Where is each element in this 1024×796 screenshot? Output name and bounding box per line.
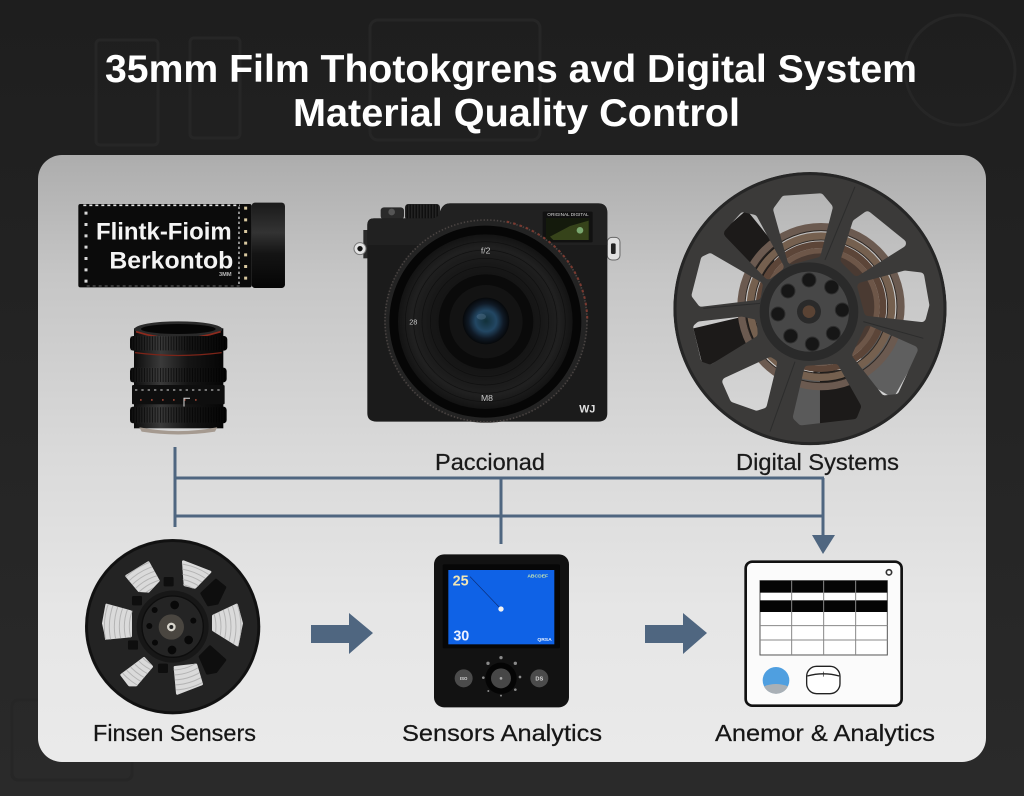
icon: small film reel xyxy=(85,539,260,714)
monitor screen xyxy=(448,570,554,645)
reel film roll xyxy=(741,227,901,387)
title: 35mm Film Thotokgrens avd Digital System xyxy=(105,48,917,91)
camera lens: M8 xyxy=(481,393,493,403)
icon: lens xyxy=(130,321,227,434)
monitor screen: 30 xyxy=(453,629,469,645)
canister label xyxy=(96,218,233,278)
camera lens: f/2 xyxy=(481,245,491,255)
title: Material Quality Control xyxy=(293,92,740,135)
label: Paccionad: Paccionad xyxy=(435,449,545,475)
monitor screen: ABCDEF xyxy=(527,574,548,580)
camera badge: WJ xyxy=(579,404,595,416)
label: Digital Systems: Digital Systems xyxy=(736,449,899,475)
icon: sensor monitor xyxy=(434,554,569,707)
label: Anemor & Analytics: Anemor & Analytics xyxy=(715,720,935,746)
small reel dark windows xyxy=(129,578,225,673)
canister label: 3MM xyxy=(219,272,232,278)
camera lens: 28 xyxy=(409,317,417,326)
camera lens xyxy=(384,219,588,423)
viewfinder xyxy=(543,212,593,242)
canister label: Berkontob xyxy=(109,247,233,274)
panel: main content xyxy=(38,155,986,762)
small reel hub xyxy=(137,591,209,663)
reel flange xyxy=(673,172,947,445)
icon: large film reel xyxy=(673,172,947,445)
connector lines xyxy=(175,447,835,554)
blue gauge circle xyxy=(763,667,789,694)
monitor controls xyxy=(455,656,548,697)
canister label: Flintk-Fioim xyxy=(96,218,232,245)
arrow 1 xyxy=(311,613,373,654)
panel: data table card xyxy=(746,562,902,706)
title xyxy=(105,48,917,135)
monitor controls: DS xyxy=(535,676,543,682)
data table xyxy=(760,581,887,655)
camera dials xyxy=(381,204,440,220)
reel hub xyxy=(760,262,858,361)
icon: camera xyxy=(354,203,620,423)
monitor controls: ISO xyxy=(460,676,468,681)
monitor screen: 25 xyxy=(453,574,469,590)
icon: film canister xyxy=(78,203,285,288)
camera strap lugs xyxy=(354,230,620,260)
reel dark inserts xyxy=(693,210,923,428)
monitor screen: QRSA xyxy=(537,637,552,643)
arrow 2 xyxy=(645,613,707,654)
label: Finsen Sensers: Finsen Sensers xyxy=(93,720,256,746)
label: Sensors Analytics: Sensors Analytics xyxy=(402,720,602,746)
small reel light windows xyxy=(103,558,242,695)
cup outline icon xyxy=(807,666,840,694)
viewfinder: ORIGINAL DIGITAL xyxy=(547,212,589,217)
